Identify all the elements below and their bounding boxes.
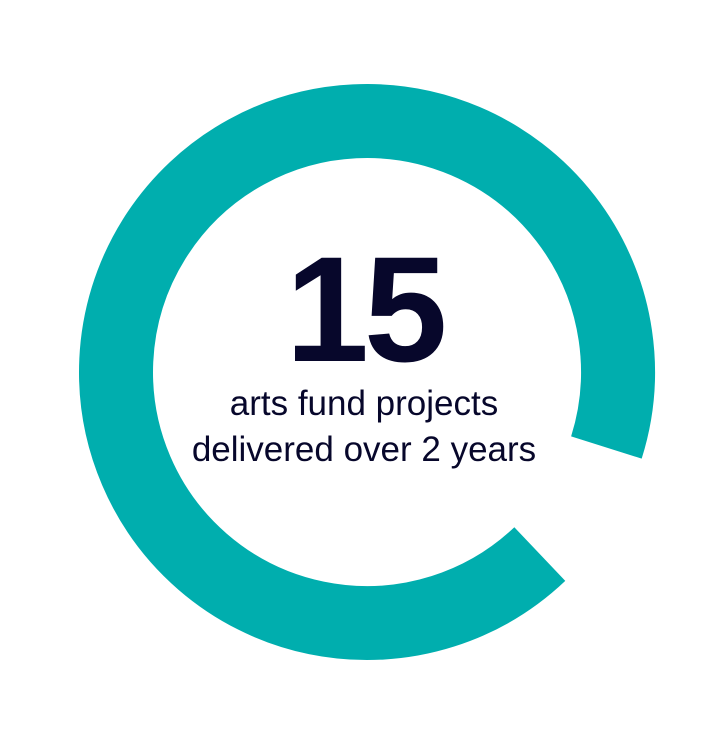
label text [192,384,536,469]
label text: arts fund projects [230,384,498,423]
big number: 15 [286,225,442,393]
label text: delivered over 2 years [192,430,536,469]
